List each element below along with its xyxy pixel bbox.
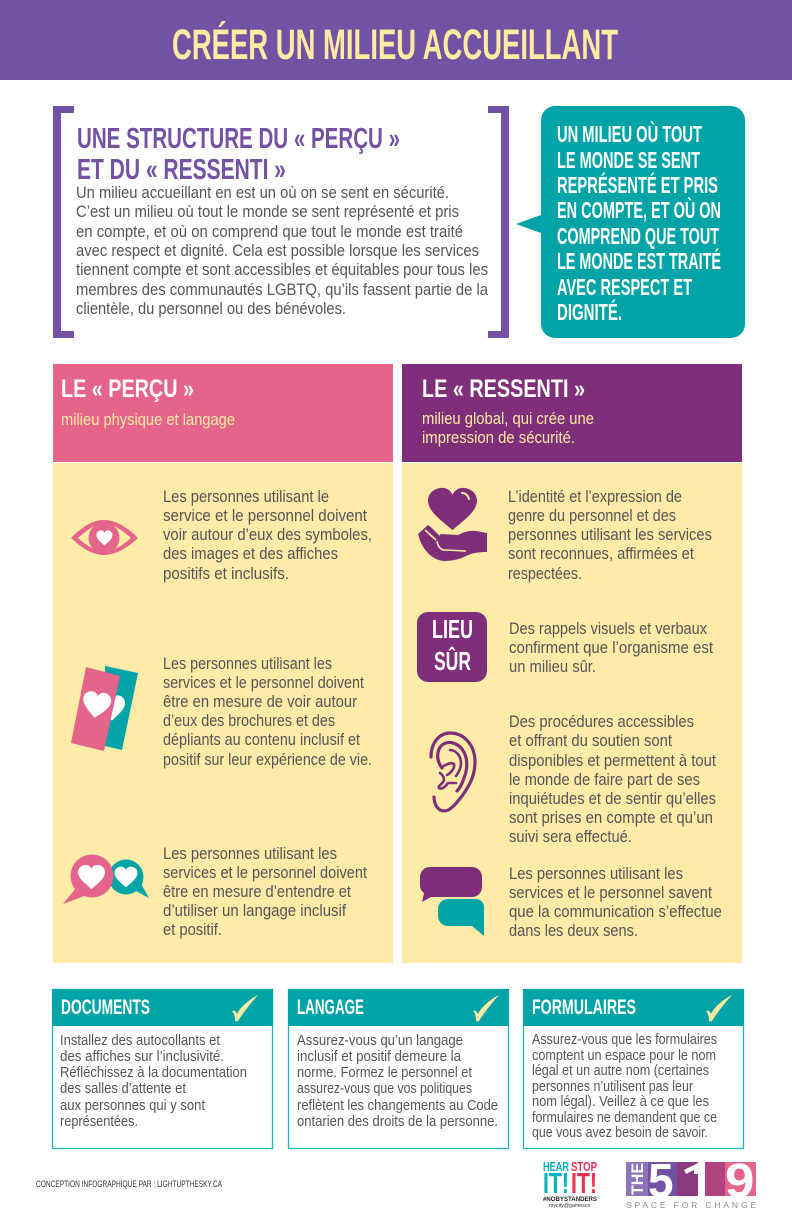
panel: documents: des salles d’attente et: [60, 1081, 186, 1097]
icon: chat bubbles: [420, 867, 484, 936]
panel: formulaires: FORMULAIRES: [532, 996, 636, 1019]
footer credit: CONCEPTION INFOGRAPHIQUE PAR : LIGHTUPTHESKY.CA: [36, 1179, 222, 1189]
icon: ear: [431, 733, 475, 811]
text block: symbols: des images et des affiches: [163, 544, 338, 563]
icon: brochures: [71, 666, 138, 751]
logo: the 519: THE: [628, 1163, 647, 1195]
panel: langage: norme. Formez le personnel et: [297, 1065, 472, 1081]
icon: check mark: [232, 995, 258, 1021]
text block: intro paragraph: C’est un milieu où tout le monde se sent représenté et pris: [76, 202, 459, 221]
text block: procedures: [509, 712, 716, 846]
text block: brochures: être en mesure de voir autour: [163, 692, 357, 711]
logo: hear it stop it: mycity@gamescs: [549, 1203, 591, 1209]
text block: reminders: confirment que l’organisme est: [509, 638, 713, 657]
icon: lieu sûr badge: SÛR: [434, 646, 471, 676]
panel: formulaires: nom légal). Veillez à ce que les: [532, 1094, 709, 1110]
text block: gender identity: personnes utilisant les services: [508, 525, 712, 544]
logo: the 519: 5: [648, 1153, 674, 1207]
icon: check mark: [473, 995, 499, 1021]
text block: procedures: sont prises en compte et qu’un: [509, 808, 713, 827]
panel: le perçu: [53, 364, 393, 963]
text block: language: [163, 844, 367, 939]
icon: eye: [71, 520, 138, 555]
text block: language: d’utiliser un langage inclusif: [163, 901, 346, 920]
panel: formulaires: [523, 989, 744, 1148]
panel: formulaires: personnes n’utilisent pas leur: [532, 1079, 693, 1095]
panel header: le perçu: milieu physique et langage: [61, 410, 235, 429]
text block: language: services et le personnel doivent: [163, 863, 367, 882]
heading: structure: [77, 123, 400, 186]
panel header: le ressenti: impression de sécurité.: [422, 428, 575, 447]
panel: formulaires: Assurez-vous que les formulaires: [532, 1032, 717, 1048]
logo: the 519: SPACE FOR CHANGE: [626, 1200, 756, 1210]
panel: documents: représentées.: [60, 1114, 138, 1130]
text block: language: Les personnes utilisant les: [163, 844, 337, 863]
text block: reminders: Des rappels visuels et verbaux: [509, 619, 707, 638]
panel header: le ressenti: LE « RESSENTI »: [422, 375, 585, 403]
panel: le ressenti: [402, 364, 742, 963]
text block: intro paragraph: tiennent compte et sont accessibles et équitables pour tous les: [76, 260, 488, 279]
text block: symbols: service et le personnel doivent: [163, 506, 367, 525]
title banner: [0, 0, 792, 80]
panel: documents: aux personnes qui y sont: [60, 1098, 205, 1114]
callout: teal speech bubble: UN MILIEU OÙ TOUT: [557, 120, 702, 147]
text block: reminders: un milieu sûr.: [509, 657, 596, 676]
text block: symbols: [163, 487, 372, 583]
panel: documents: des affiches sur l’inclusivité.: [60, 1049, 224, 1065]
text block: procedures: le monde de faire part de ses: [509, 770, 700, 789]
text block: intro paragraph: en compte, et où on comprend que tout le monde est traité: [76, 222, 463, 241]
text block: intro paragraph: avec respect et dignité. Cela est possible lorsque les services: [76, 241, 479, 260]
text block: intro paragraph: Un milieu accueillant en est un où on se sent en sécurité.: [76, 183, 449, 202]
panel header: le perçu: LE « PERÇU »: [61, 375, 194, 403]
panel: formulaires: que vous avez besoin de savoir.: [532, 1125, 708, 1141]
callout: teal speech bubble: AVEC RESPECT ET: [557, 274, 692, 300]
panel: formulaires: formulaires ne demandent que ce: [532, 1110, 717, 1126]
panel: langage: inclusif et positif demeure la: [297, 1049, 462, 1065]
logo: the 519: 9: [725, 1153, 754, 1207]
text block: brochures: d’eux des brochures et des: [163, 711, 335, 730]
callout: teal speech bubble: LE MONDE SE SENT: [557, 147, 700, 173]
icon: lieu sûr badge: LIEU: [432, 614, 473, 644]
panel: documents: [52, 989, 273, 1148]
panel header: le ressenti: milieu global, qui crée une: [422, 409, 594, 428]
text block: brochures: dépliants au contenu inclusif et: [163, 730, 360, 749]
icon: check mark: [706, 995, 732, 1021]
text block: procedures: inquiétudes et de sentir qu’elles: [509, 789, 716, 808]
text block: brochures: positif sur leur expérience de vie.: [163, 750, 372, 769]
text block: symbols: voir autour d’eux des symboles,: [163, 525, 372, 544]
logo: the 519: [626, 1153, 756, 1210]
heading: structure: UNE STRUCTURE DU « PERÇU »: [77, 123, 400, 155]
text block: reminders: [509, 619, 713, 676]
panel: formulaires: légal et un autre nom (certaines: [532, 1063, 709, 1079]
heading: structure: ET DU « RESSENTI »: [77, 154, 286, 186]
callout: teal speech bubble: DIGNITÉ.: [557, 298, 622, 325]
text block: intro paragraph: membres des communautés LGBTQ, qu’ils fassent partie de la: [76, 280, 488, 299]
text block: procedures: disponibles et permettent à tout: [509, 751, 716, 770]
icon: speech bubbles with hearts: [63, 854, 149, 904]
panel: documents: Installez des autocollants et: [60, 1033, 220, 1049]
text block: procedures: suivi sera effectué.: [509, 827, 632, 846]
panel: langage: Assurez-vous qu’un langage: [297, 1033, 463, 1049]
icon: lieu sûr badge: [417, 612, 487, 682]
panel: langage: assurez-vous que vos politiques: [297, 1081, 472, 1097]
logo: hear it stop it: IT!: [571, 1168, 597, 1200]
text block: two-way communication: que la communication s’effectue: [509, 902, 722, 921]
panel: documents: Réfléchissez à la documentation: [60, 1065, 247, 1081]
text block: gender identity: L’identité et l’expression de: [508, 487, 682, 506]
text block: brochures: services et le personnel doivent: [163, 673, 364, 692]
text block: two-way communication: [509, 864, 722, 940]
logo: hear it stop it: #NOBYSTANDERS: [543, 1196, 598, 1203]
panel: langage: [288, 989, 509, 1148]
panel header: le ressenti: [402, 364, 742, 462]
panel: formulaires: comptent un espace pour le nom: [532, 1048, 716, 1064]
panel header: le perçu: [53, 364, 393, 462]
text block: gender identity: genre du personnel et des: [508, 506, 676, 525]
text block: intro paragraph: [76, 183, 488, 318]
logo: hear it stop it: HEAR: [543, 1159, 569, 1174]
text block: gender identity: respectées.: [508, 564, 582, 583]
logo: hear it stop it: IT!: [543, 1168, 569, 1200]
text block: procedures: Des procédures accessibles: [509, 712, 694, 731]
text block: two-way communication: services et le personnel savent: [509, 883, 712, 902]
icon: heart in hand: [418, 488, 487, 561]
text block: brochures: [163, 654, 372, 769]
text block: language: et positif.: [163, 920, 222, 939]
panel: documents: DOCUMENTS: [61, 996, 150, 1019]
logo: hear it stop it: [543, 1159, 598, 1209]
panel: langage: ontarien des droits de la personne.: [297, 1114, 498, 1130]
text block: brochures: Les personnes utilisant les: [163, 654, 332, 673]
text block: two-way communication: dans les deux sens.: [509, 921, 638, 940]
text block: symbols: Les personnes utilisant le: [163, 487, 329, 506]
panel: langage: reflètent les changements au Code: [297, 1098, 498, 1114]
text block: two-way communication: Les personnes utilisant les: [509, 864, 683, 883]
text block: procedures: et offrant du soutien sont: [509, 731, 672, 750]
text block: gender identity: sont reconnues, affirmées et: [508, 544, 694, 563]
callout: teal speech bubble: [516, 106, 745, 338]
text block: intro paragraph: clientèle, du personnel ou des bénévoles.: [76, 299, 346, 318]
text block: gender identity: [508, 487, 712, 583]
panel: langage: LANGAGE: [297, 996, 364, 1019]
text block: language: être en mesure d’entendre et: [163, 882, 351, 901]
logo: hear it stop it: STOP: [571, 1159, 597, 1174]
panel: intro bracketed text: [53, 106, 509, 338]
text block: symbols: positifs et inclusifs.: [163, 564, 289, 583]
